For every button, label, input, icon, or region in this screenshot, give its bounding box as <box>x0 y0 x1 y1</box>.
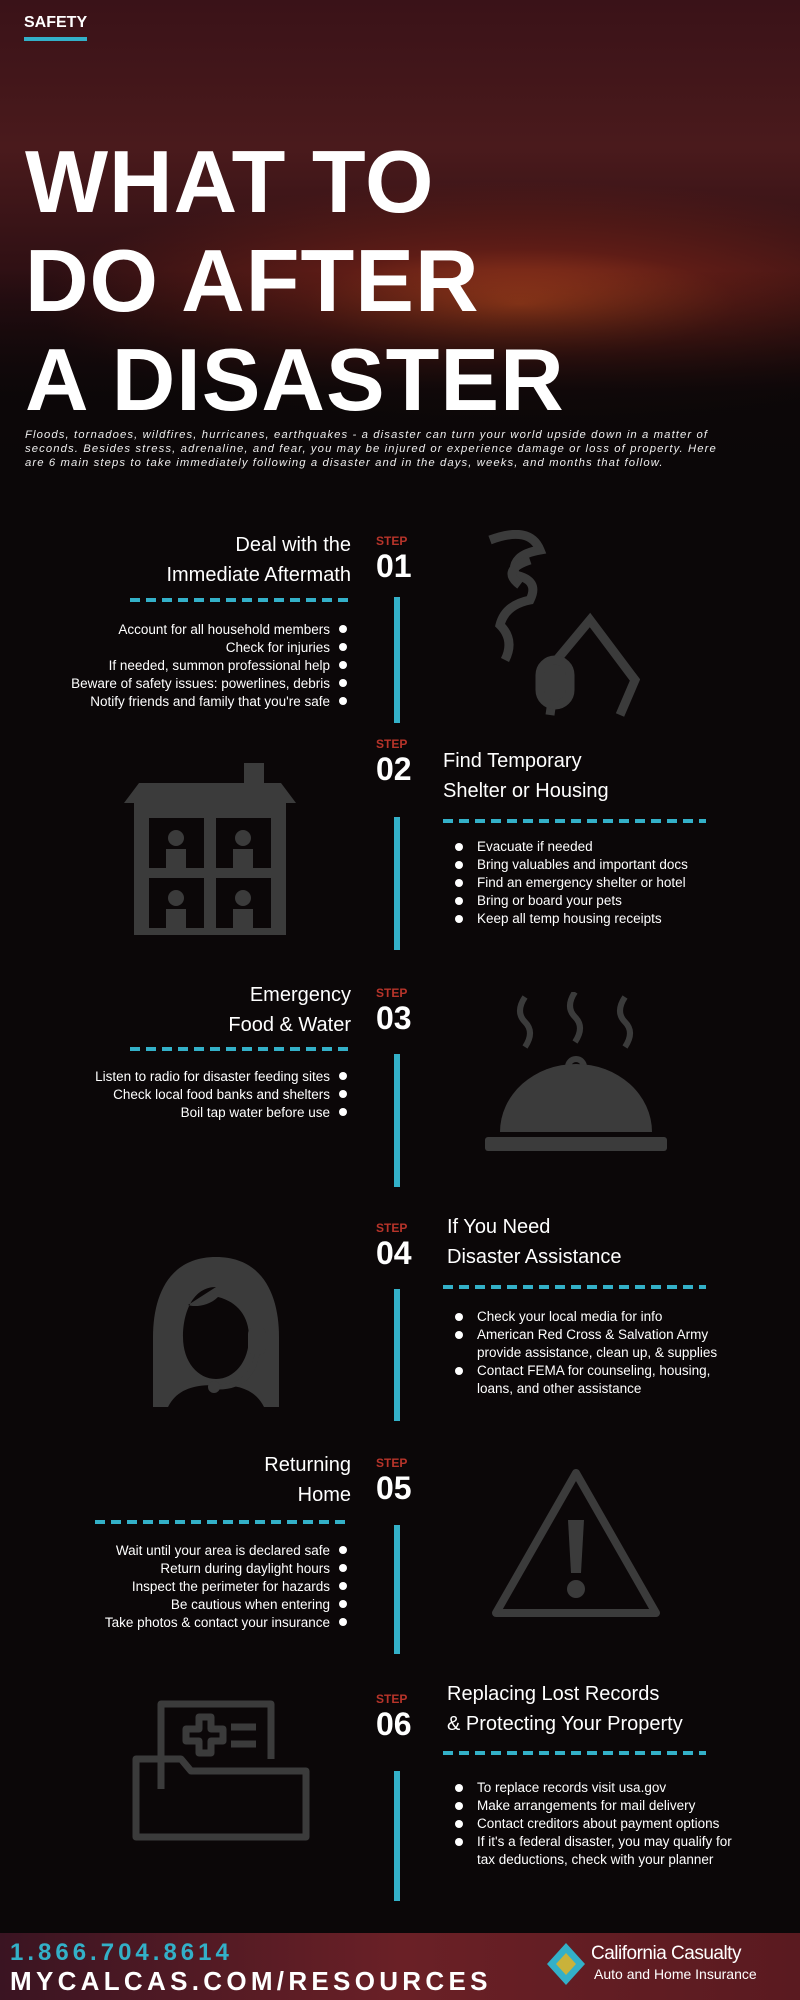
step 06: Contact creditors about payment options <box>477 1816 719 1831</box>
step 02: 02 <box>376 751 412 787</box>
step 06: & Protecting Your Property <box>447 1713 683 1735</box>
step 01: 01 <box>376 548 412 584</box>
step 03: Check local food banks and shelters <box>113 1087 330 1102</box>
step 06: 06 <box>376 1706 412 1742</box>
step 02: STEP <box>376 737 407 751</box>
step 05: Returning <box>264 1454 351 1476</box>
footer <box>0 1933 800 2000</box>
step 01: If needed, summon professional help <box>109 658 330 673</box>
intro text: Floods, tornadoes, wildfires, hurricanes, earthquakes - a disaster can turn your world upside down in a matter of <box>25 429 708 441</box>
intro text: seconds. Besides stress, adrenaline, and fear, you may be injured or experience damage or loss of property. Here <box>25 443 717 455</box>
header background <box>0 0 800 490</box>
step 05 <box>95 1454 660 1654</box>
title: A DISASTER <box>25 330 565 429</box>
step 04: loans, and other assistance <box>477 1381 641 1396</box>
icon: tornado and house <box>488 530 640 716</box>
step 01: STEP <box>376 534 407 548</box>
step 03: Food & Water <box>228 1014 351 1036</box>
step 02: Find Temporary <box>443 750 582 772</box>
step 06: If it's a federal disaster, you may qualify for <box>477 1834 732 1849</box>
step 02: Bring or board your pets <box>477 893 622 908</box>
step 03: Boil tap water before use <box>181 1105 330 1120</box>
icon: woman with headset <box>153 1257 279 1407</box>
phone number: 1.866.704.8614 <box>10 1939 233 1966</box>
step 03: Emergency <box>250 984 351 1006</box>
step 06: tax deductions, check with your planner <box>477 1852 713 1867</box>
step 06: Make arrangements for mail delivery <box>477 1798 695 1813</box>
logo: California Casualty <box>591 1943 741 1964</box>
step 02: Shelter or Housing <box>443 780 609 802</box>
title: DO AFTER <box>25 231 480 330</box>
step 05: Wait until your area is declared safe <box>116 1543 330 1558</box>
step 06: To replace records visit usa.gov <box>477 1780 666 1795</box>
step 01: Notify friends and family that you're safe <box>90 694 330 709</box>
title: WHAT TO <box>25 132 434 231</box>
step 05: STEP <box>376 1456 407 1470</box>
step 04: If You Need <box>447 1216 550 1238</box>
icon: food cloche <box>485 992 667 1151</box>
label: safety <box>24 14 87 41</box>
step 01: Deal with the <box>235 534 351 556</box>
step 04: 04 <box>376 1235 412 1271</box>
icon: warning triangle <box>492 1469 660 1617</box>
step 01: Account for all household members <box>118 622 330 637</box>
step 02: Keep all temp housing receipts <box>477 911 662 926</box>
step 04: Contact FEMA for counseling, housing, <box>477 1363 710 1378</box>
step 03: STEP <box>376 986 407 1000</box>
step 05: Be cautious when entering <box>171 1597 330 1612</box>
step 02: Find an emergency shelter or hotel <box>477 875 686 890</box>
website url: MYCALCAS.COM/RESOURCES <box>10 1966 492 1996</box>
step 04: provide assistance, clean up, & supplies <box>477 1345 717 1360</box>
logo: Auto and Home Insurance <box>594 1966 757 1982</box>
title <box>25 132 565 429</box>
step 02 <box>124 737 706 950</box>
logo <box>547 1943 757 1985</box>
step 04: American Red Cross & Salvation Army <box>477 1327 708 1342</box>
intro text: are 6 main steps to take immediately following a disaster and in the days, weeks, and months that follow. <box>25 457 664 469</box>
step 03: Listen to radio for disaster feeding sites <box>95 1069 330 1084</box>
step 01: Immediate Aftermath <box>166 564 351 586</box>
icon: building <box>124 763 296 935</box>
step 01: Check for injuries <box>226 640 330 655</box>
step 02: Bring valuables and important docs <box>477 857 688 872</box>
step 01: Beware of safety issues: powerlines, debris <box>71 676 330 691</box>
icon: medical folder <box>132 1700 310 1840</box>
step 02: Evacuate if needed <box>477 839 593 854</box>
step 04: Disaster Assistance <box>447 1246 622 1268</box>
step 06: STEP <box>376 1692 407 1706</box>
step 04 <box>153 1216 717 1421</box>
step 04: Check your local media for info <box>477 1309 662 1324</box>
step 05: Return during daylight hours <box>160 1561 330 1576</box>
step 05: Inspect the perimeter for hazards <box>132 1579 330 1594</box>
step 03: 03 <box>376 1000 412 1036</box>
intro text <box>25 429 717 469</box>
step 06: Replacing Lost Records <box>447 1683 659 1705</box>
step 04: STEP <box>376 1221 407 1235</box>
step 05: 05 <box>376 1470 412 1506</box>
step 05: Take photos & contact your insurance <box>105 1615 330 1630</box>
step 05: Home <box>298 1484 351 1506</box>
step 01 <box>71 530 640 723</box>
step 06 <box>132 1683 732 1901</box>
label: safety: SAFETY <box>24 14 87 31</box>
step 03 <box>95 984 667 1187</box>
